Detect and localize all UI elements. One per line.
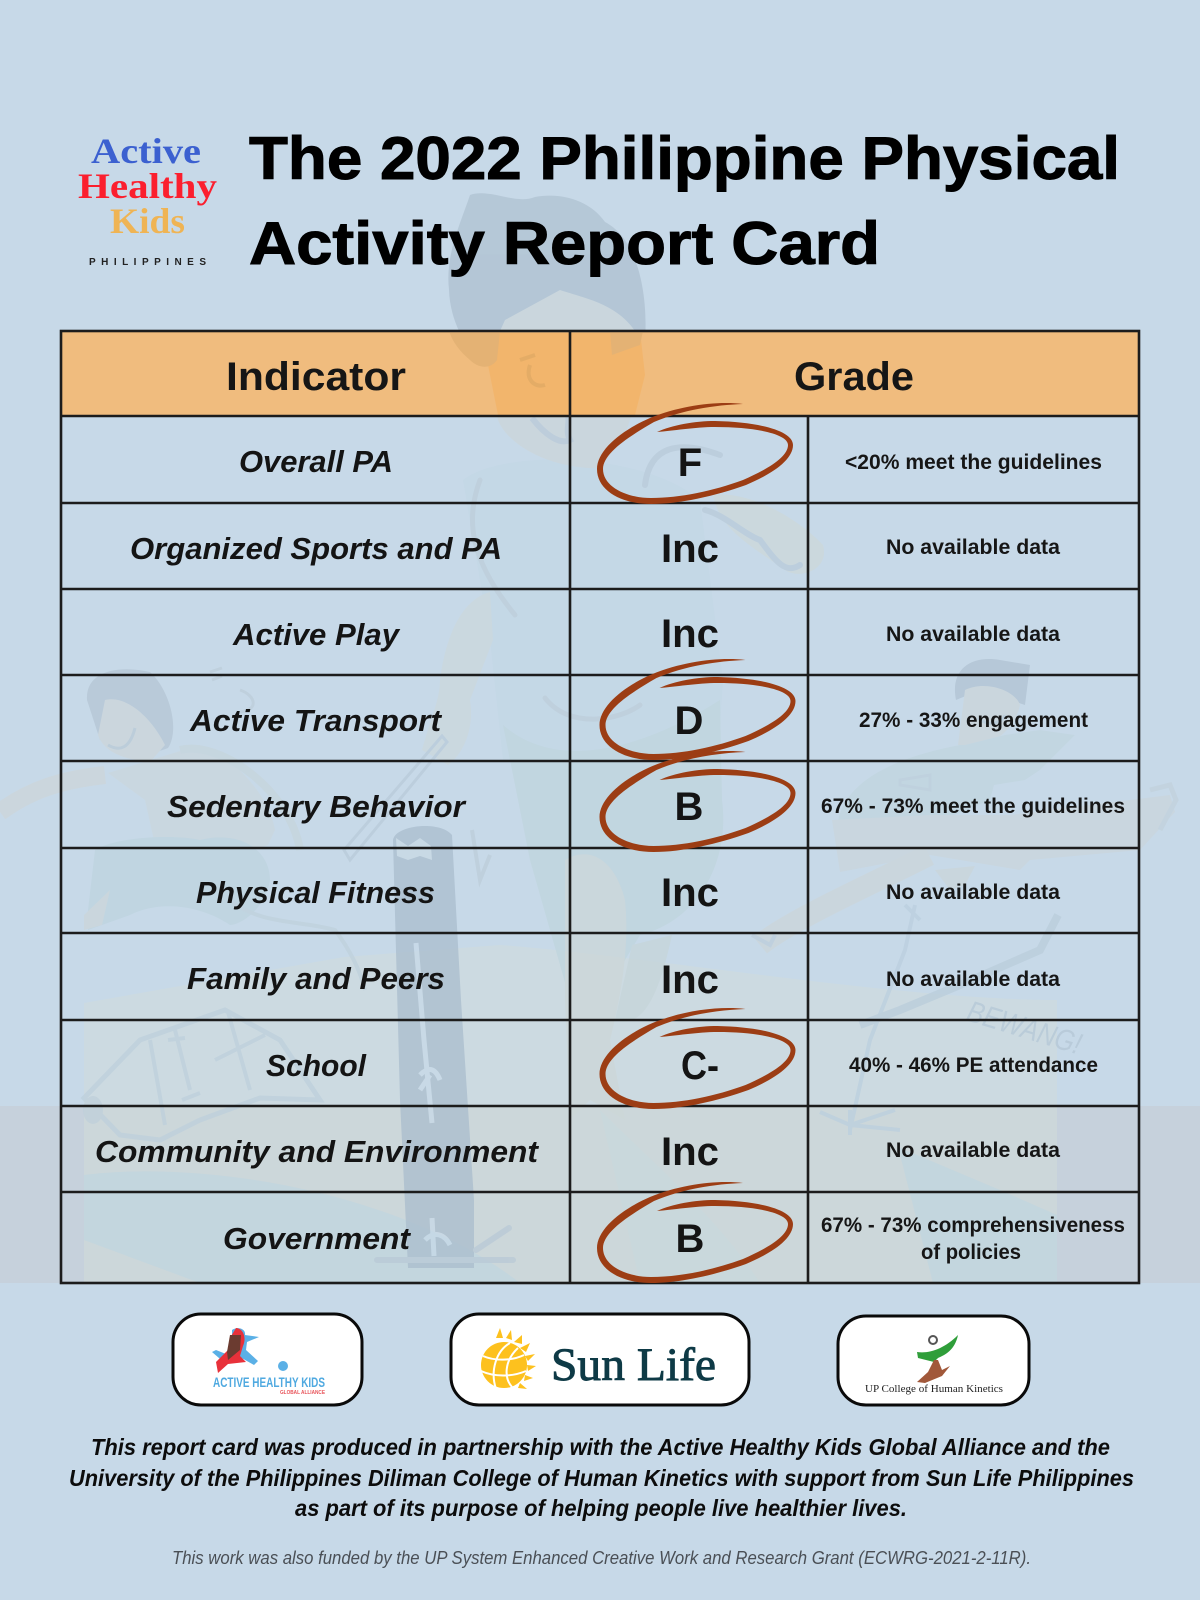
row: Community and Environment: No available data xyxy=(886,1139,1060,1162)
row: Physical Fitness xyxy=(196,871,1060,915)
logo: Active Healthy Kids Philippines: Healthy xyxy=(78,166,217,206)
row: Organized Sports and PA: No available data xyxy=(886,536,1060,559)
title xyxy=(249,125,1120,277)
row: Active Transport: 27% - 33% engagement xyxy=(859,709,1088,732)
grade circle: F xyxy=(597,403,793,504)
wordmark: Global Alliance: GLOBAL ALLIANCE xyxy=(280,1390,325,1396)
row: Physical Fitness: No available data xyxy=(886,881,1060,904)
title: Activity Report Card xyxy=(249,210,880,277)
row: Active Play: No available data xyxy=(886,623,1060,646)
text block: funding note: This work was also funded by the UP System Enhanced Creative Work and Research Grant (ECWRG-2021-2-11R). xyxy=(172,1548,1031,1568)
row: Organized Sports and PA xyxy=(130,527,1060,571)
row: Organized Sports and PA: Inc xyxy=(661,527,719,571)
row: Overall PA xyxy=(239,441,1102,485)
grade circle: C- xyxy=(600,1008,796,1109)
row: Family and Peers xyxy=(187,958,1060,1002)
row: Organized Sports and PA: Organized Sports and PA xyxy=(130,531,502,566)
row: Sedentary Behavior: B xyxy=(675,785,703,829)
row: Community and Environment: Inc xyxy=(661,1130,719,1174)
partner logo: Active Healthy Kids Global Alliance xyxy=(173,1314,362,1405)
text block: partnership statement: as part of its purpose of helping people live healthier lives. xyxy=(295,1495,907,1521)
logo: Active Healthy Kids Philippines: Active xyxy=(91,131,201,171)
row: School: School xyxy=(266,1048,367,1083)
row: Family and Peers: Inc xyxy=(661,958,719,1002)
text block: partnership statement: This report card was produced in partnership with the Active Healthy Kids Global Alliance and the xyxy=(91,1434,1110,1460)
column heading: Grade: Grade xyxy=(794,355,914,399)
partner logo: UP College of Human Kinetics xyxy=(838,1316,1029,1405)
row: Sedentary Behavior: Sedentary Behavior xyxy=(167,789,467,824)
row: Sedentary Behavior: 67% - 73% meet the guidelines xyxy=(821,795,1125,818)
column heading: Indicator: Indicator xyxy=(226,355,406,399)
row: Government: of policies xyxy=(921,1241,1021,1264)
row: Overall PA: Overall PA xyxy=(239,444,393,479)
table grid xyxy=(61,331,1139,1283)
logo: Active Healthy Kids Philippines: PHILIPPINES xyxy=(89,257,206,268)
row: Community and Environment xyxy=(95,1130,1060,1174)
wordmark: Sun Life: Sun Life xyxy=(551,1339,716,1391)
title: The 2022 Philippine Physical xyxy=(249,125,1120,192)
row: Physical Fitness: Inc xyxy=(661,871,719,915)
grade circle: B government xyxy=(597,1182,793,1283)
partner logo: Sun Life xyxy=(451,1314,749,1405)
logo: Active Healthy Kids Philippines xyxy=(78,131,217,268)
row: Government: B xyxy=(676,1217,704,1261)
background illustration: children playing: BEWANG! xyxy=(963,995,1086,1061)
row: School: 40% - 46% PE attendance xyxy=(849,1054,1098,1077)
text block: partnership statement: University of the Philippines Diliman College of Human Kinetics with support from Sun Life Philippines xyxy=(69,1465,1134,1491)
row: School: C- xyxy=(681,1044,719,1088)
row: Active Transport xyxy=(189,699,1088,743)
row: Active Play: Inc xyxy=(661,612,719,656)
row: Sedentary Behavior xyxy=(167,785,1125,829)
row: Community and Environment: Community and Environment xyxy=(95,1134,540,1169)
row: Government: 67% - 73% comprehensiveness xyxy=(821,1214,1125,1237)
icon: UP CHK figure xyxy=(917,1335,958,1383)
row: Overall PA: F xyxy=(678,441,702,485)
row: Government: Government xyxy=(223,1221,412,1256)
row: Overall PA: <20% meet the guidelines xyxy=(845,451,1102,474)
background figure showing through the header xyxy=(449,331,645,415)
grade circle: B sedentary xyxy=(600,751,796,852)
row: Active Transport: Active Transport xyxy=(189,703,443,738)
icon: running child xyxy=(212,1328,288,1373)
table header: fill xyxy=(61,331,1139,416)
row: Government xyxy=(223,1214,1125,1264)
row: Family and Peers: Family and Peers xyxy=(187,961,445,996)
row: Active Transport: D xyxy=(675,699,703,743)
wordmark: UP College of Human Kinetics: UP College of Human Kinetics xyxy=(865,1383,1003,1395)
row: Physical Fitness: Physical Fitness xyxy=(196,875,435,910)
row: School xyxy=(266,1044,1098,1088)
wordmark: Active Healthy Kids: ACTIVE HEALTHY KIDS xyxy=(213,1374,325,1390)
row: Active Play: Active Play xyxy=(232,617,401,652)
background illustration: children playing xyxy=(0,193,1200,1283)
icon: sun globe xyxy=(481,1328,536,1389)
row: Active Play xyxy=(232,612,1060,656)
logo: Active Healthy Kids Philippines: Kids xyxy=(110,201,185,241)
panel: report card table xyxy=(61,331,1139,1283)
text block: partnership statement xyxy=(69,1434,1134,1521)
row: Family and Peers: No available data xyxy=(886,968,1060,991)
grade circle: D xyxy=(600,659,796,760)
